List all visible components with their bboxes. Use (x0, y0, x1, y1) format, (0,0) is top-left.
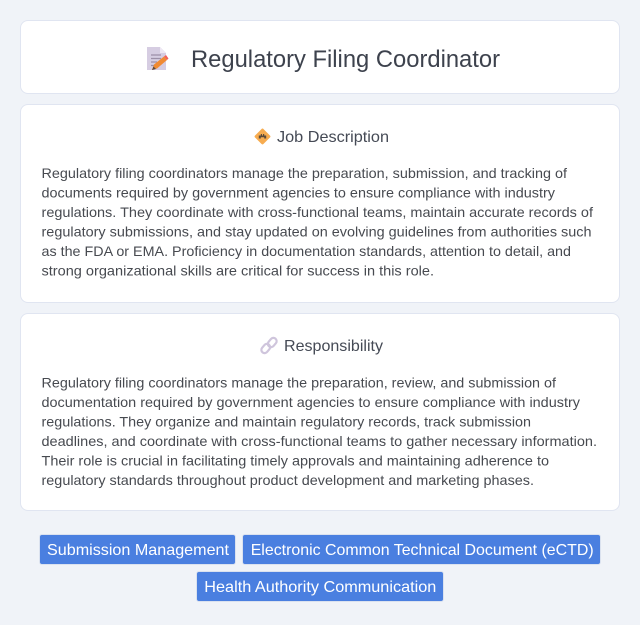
text block: responsibility (42, 374, 597, 488)
text block: responsibility: regulatory standards throughout product development and marketing phases. (42, 472, 534, 488)
icon: orange diamond (254, 128, 270, 144)
text block: job description: regulations. They coordinate with cross-functional teams, maintain accurate records of (42, 204, 593, 220)
text block: responsibility: regulations. They organize and maintain regulatory records, track submission (42, 414, 531, 430)
text block: job description: documents required by government agencies to ensure compliance with industry (42, 184, 555, 200)
tag: submission management (39, 534, 236, 565)
text block: job description: regulatory submissions, and stay updated on evolving guidelines from authorities such (42, 224, 592, 240)
text block: responsibility: Their role is crucial in facilitating timely approvals and maintaining adherence to (42, 452, 549, 468)
tag: health authority communication (196, 571, 444, 602)
panel: job description (20, 104, 620, 303)
tag: eCTD: Electronic Common Technical Document (eCTD) (251, 542, 594, 559)
text block: responsibility: deadlines, and coordinate with cross-functional teams to gather necessary information. (42, 433, 597, 449)
panel: responsibility (20, 313, 620, 511)
text block: responsibility: Regulatory filing coordinators manage the preparation, review, and submission of (42, 374, 556, 390)
tag: health authority communication: Health Authority Communication (204, 579, 436, 596)
title: Regulatory Filing Coordinator (191, 46, 500, 73)
text block: responsibility: documentation required by government agencies to ensure compliance with industry (42, 394, 580, 410)
icon: chain link (260, 336, 278, 354)
icon: document with pencil (147, 47, 168, 70)
text block: job description: Regulatory filing coordinators manage the preparation, submission, and tracking of (42, 165, 567, 181)
heading: responsibility: Responsibility (284, 338, 383, 355)
text block: job description (42, 165, 594, 278)
text block: job description: strong organizational skills are critical for success in this role. (42, 262, 434, 278)
heading: job description: Job Description (277, 129, 389, 146)
text block: job description: as the FDA or EMA. Proficiency in documentation standards, attention to detail, and (42, 243, 571, 259)
tag: submission management: Submission Management (47, 542, 230, 559)
panel: title card (20, 20, 620, 94)
tag: eCTD (242, 534, 601, 565)
